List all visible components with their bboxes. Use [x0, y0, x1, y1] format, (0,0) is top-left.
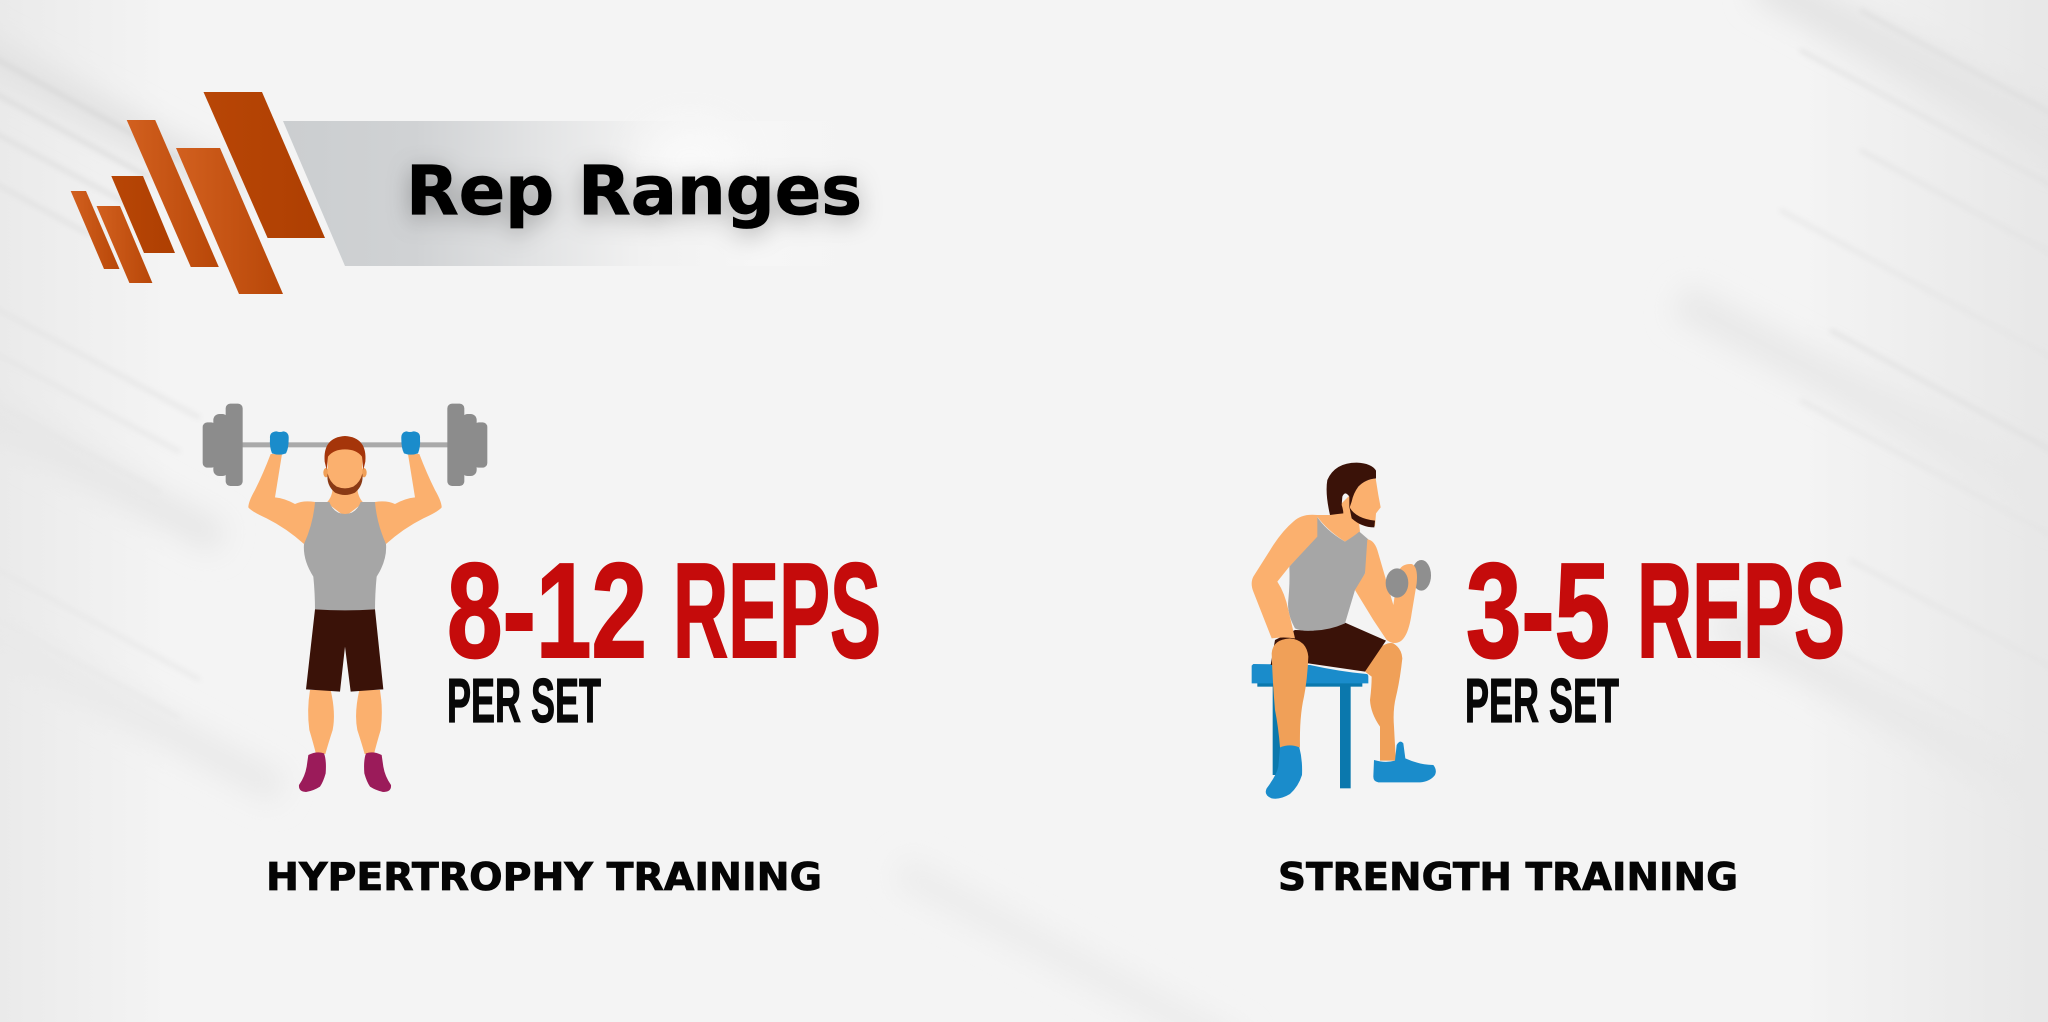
arms [248, 454, 442, 544]
figure: man seated doing dumbbell curl [1252, 463, 1436, 799]
tank top [1288, 515, 1369, 631]
left per set: PER SET [447, 667, 601, 736]
left arm [1252, 515, 1317, 638]
title: Rep Ranges [406, 152, 862, 231]
right rep count: 3-5 [1466, 535, 1610, 686]
header band [283, 121, 880, 266]
gloves [270, 431, 420, 455]
shoes [1266, 742, 1436, 799]
logo: orange bars [71, 92, 325, 294]
shoes [299, 752, 391, 792]
right rep count [1466, 535, 1845, 686]
left caption: HYPERTROPHY TRAINING [266, 855, 822, 899]
barbell [203, 404, 487, 486]
tank top [304, 502, 386, 611]
dumbbell near plate [1386, 568, 1408, 598]
neck [1316, 500, 1360, 542]
left rep count: REPS [673, 535, 881, 686]
right arm holding dumbbell [1355, 539, 1417, 643]
rear leg [1365, 643, 1402, 761]
right rep count: REPS [1637, 535, 1845, 686]
legs [308, 690, 382, 754]
shorts [1271, 623, 1386, 672]
bench [1252, 664, 1368, 788]
left rep count [447, 535, 881, 686]
neck [327, 487, 363, 517]
figure: man lifting barbell overhead [203, 404, 487, 792]
shorts [306, 609, 383, 692]
head [323, 436, 367, 495]
left rep count: 8-12 [447, 535, 647, 686]
right per set: PER SET [1465, 667, 1619, 736]
front leg [1272, 638, 1308, 747]
head [1327, 463, 1381, 527]
dumbbell far plate [1412, 560, 1431, 591]
right caption: STRENGTH TRAINING [1278, 855, 1738, 899]
